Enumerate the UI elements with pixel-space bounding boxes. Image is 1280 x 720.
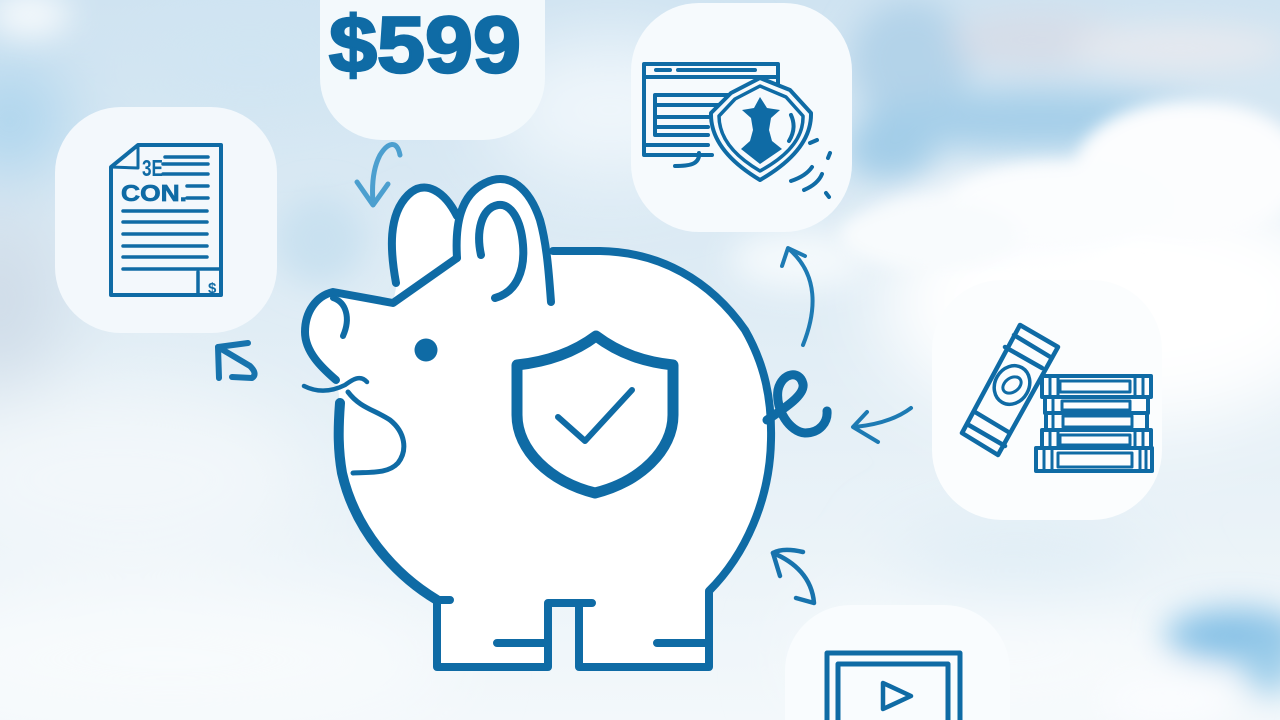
icon: contract document: 3E [142, 155, 163, 181]
whisker [304, 378, 367, 391]
icon: contract document: $ [208, 280, 217, 297]
ear inner [479, 205, 523, 298]
ear front [457, 179, 551, 302]
arrow: money to pig [853, 408, 911, 442]
icon: browser window with shield [644, 64, 830, 197]
pig eye [414, 338, 438, 362]
icon: banknote [962, 325, 1058, 455]
head and snout [305, 258, 457, 380]
pig body [307, 249, 772, 667]
icon: contract document [111, 145, 221, 297]
snout inner [333, 298, 347, 336]
arrow: video to pig [773, 550, 814, 603]
ear back [392, 188, 457, 283]
card: price [320, 0, 545, 140]
price text: $599 [329, 0, 521, 89]
card: security shield [631, 3, 852, 232]
card: money and coin stack [932, 280, 1162, 520]
arrow: price to pig [357, 144, 400, 205]
shield with check mark [517, 336, 673, 493]
arrow: pig to shield [782, 248, 813, 345]
arrow: pig to document [218, 343, 255, 378]
tail [767, 375, 827, 433]
back line [553, 251, 771, 667]
icon: video player [827, 653, 960, 720]
mouth [348, 392, 404, 473]
icon: contract document: CON. [121, 180, 187, 206]
card: contract document [55, 107, 277, 333]
belly [339, 403, 437, 600]
legs [437, 600, 592, 667]
icon: stacked bills [1036, 376, 1152, 471]
piggy bank [304, 178, 827, 667]
card: video [785, 605, 1010, 720]
shield emblem [711, 78, 811, 180]
